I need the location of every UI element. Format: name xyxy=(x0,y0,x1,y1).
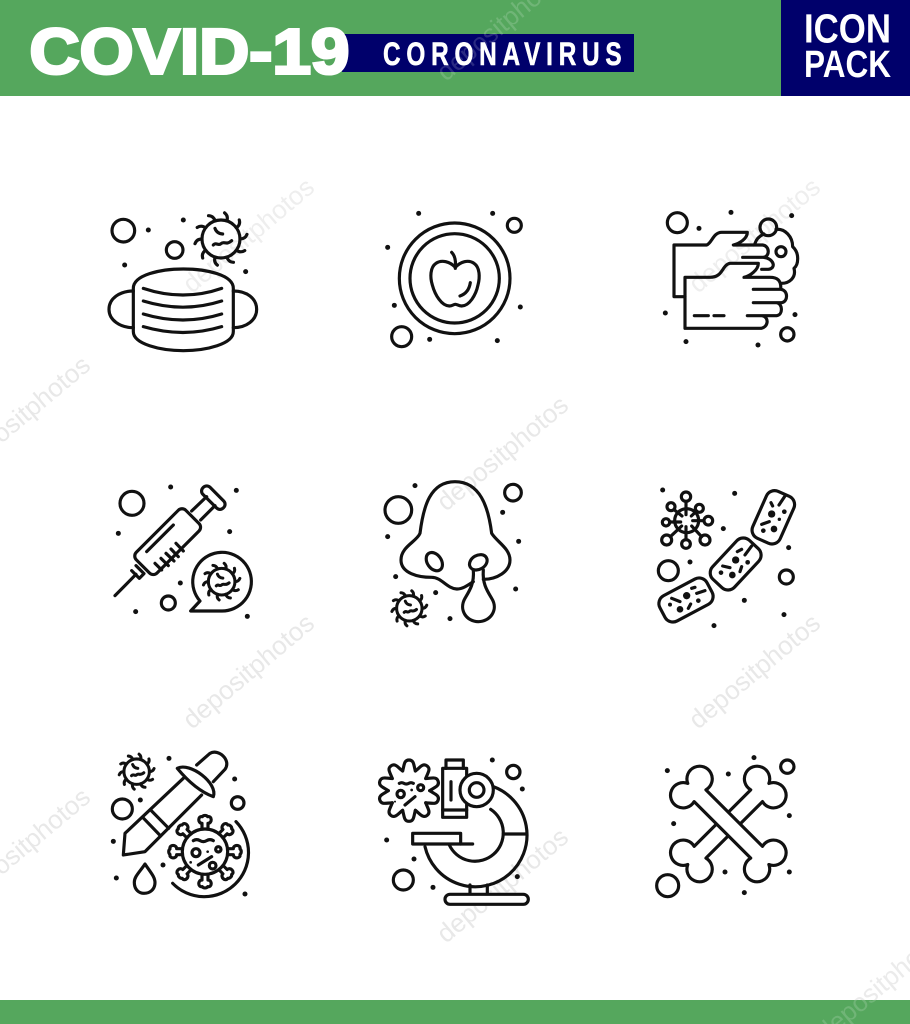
arc around virus xyxy=(173,822,249,897)
virus with spokes xyxy=(662,492,713,548)
icon: runny nose xyxy=(385,482,521,626)
mask body xyxy=(133,269,233,351)
subtitle: CORONAVIRUS xyxy=(383,37,622,73)
mask ear loops xyxy=(109,291,257,328)
icon: apple on plate xyxy=(385,211,523,347)
icon: dropper and virus xyxy=(111,752,249,897)
title: COVID-19 xyxy=(30,16,350,88)
drop xyxy=(134,864,155,893)
virus xyxy=(195,213,247,265)
soap foam xyxy=(755,229,798,283)
icon: face mask xyxy=(109,213,257,351)
syringe xyxy=(115,484,227,596)
back hand xyxy=(674,232,773,297)
virus blob xyxy=(378,760,440,821)
dropper xyxy=(123,752,227,855)
watermark text: depositphotos xyxy=(177,172,320,299)
footer bar xyxy=(0,1000,910,1024)
icon: crossed bones xyxy=(657,755,794,897)
icon pack badge: ICON xyxy=(804,6,891,52)
virus xyxy=(392,591,427,626)
watermark text: depositphotos xyxy=(177,608,320,735)
watermark text: depositphotos xyxy=(431,822,574,949)
icon pack badge: PACK xyxy=(804,44,891,86)
bacterium top xyxy=(749,488,797,547)
watermark text: depositphotos xyxy=(431,390,574,517)
icon: washing hands xyxy=(663,210,798,347)
bone back xyxy=(665,761,791,887)
icon: bacteria chain and virus xyxy=(656,487,797,628)
watermark text: depositphotos xyxy=(683,172,826,299)
nose outline xyxy=(401,482,510,589)
icon pack badge xyxy=(781,0,910,96)
bacterium middle xyxy=(707,534,765,594)
microscope xyxy=(413,760,528,904)
large virus xyxy=(169,815,241,888)
watermark text: depositphotos xyxy=(683,608,826,735)
speech bubble xyxy=(191,552,251,611)
small virus xyxy=(119,754,154,789)
front hand xyxy=(685,263,787,328)
apple xyxy=(431,261,479,306)
bone front xyxy=(665,761,791,887)
subtitle bar xyxy=(342,34,634,72)
header banner xyxy=(0,0,910,96)
bacterium bottom xyxy=(656,575,716,625)
icon: microscope and virus xyxy=(378,757,528,904)
mucus drop xyxy=(463,570,494,622)
mask pleats xyxy=(143,288,222,332)
icon: syringe and virus bubble xyxy=(115,484,251,619)
